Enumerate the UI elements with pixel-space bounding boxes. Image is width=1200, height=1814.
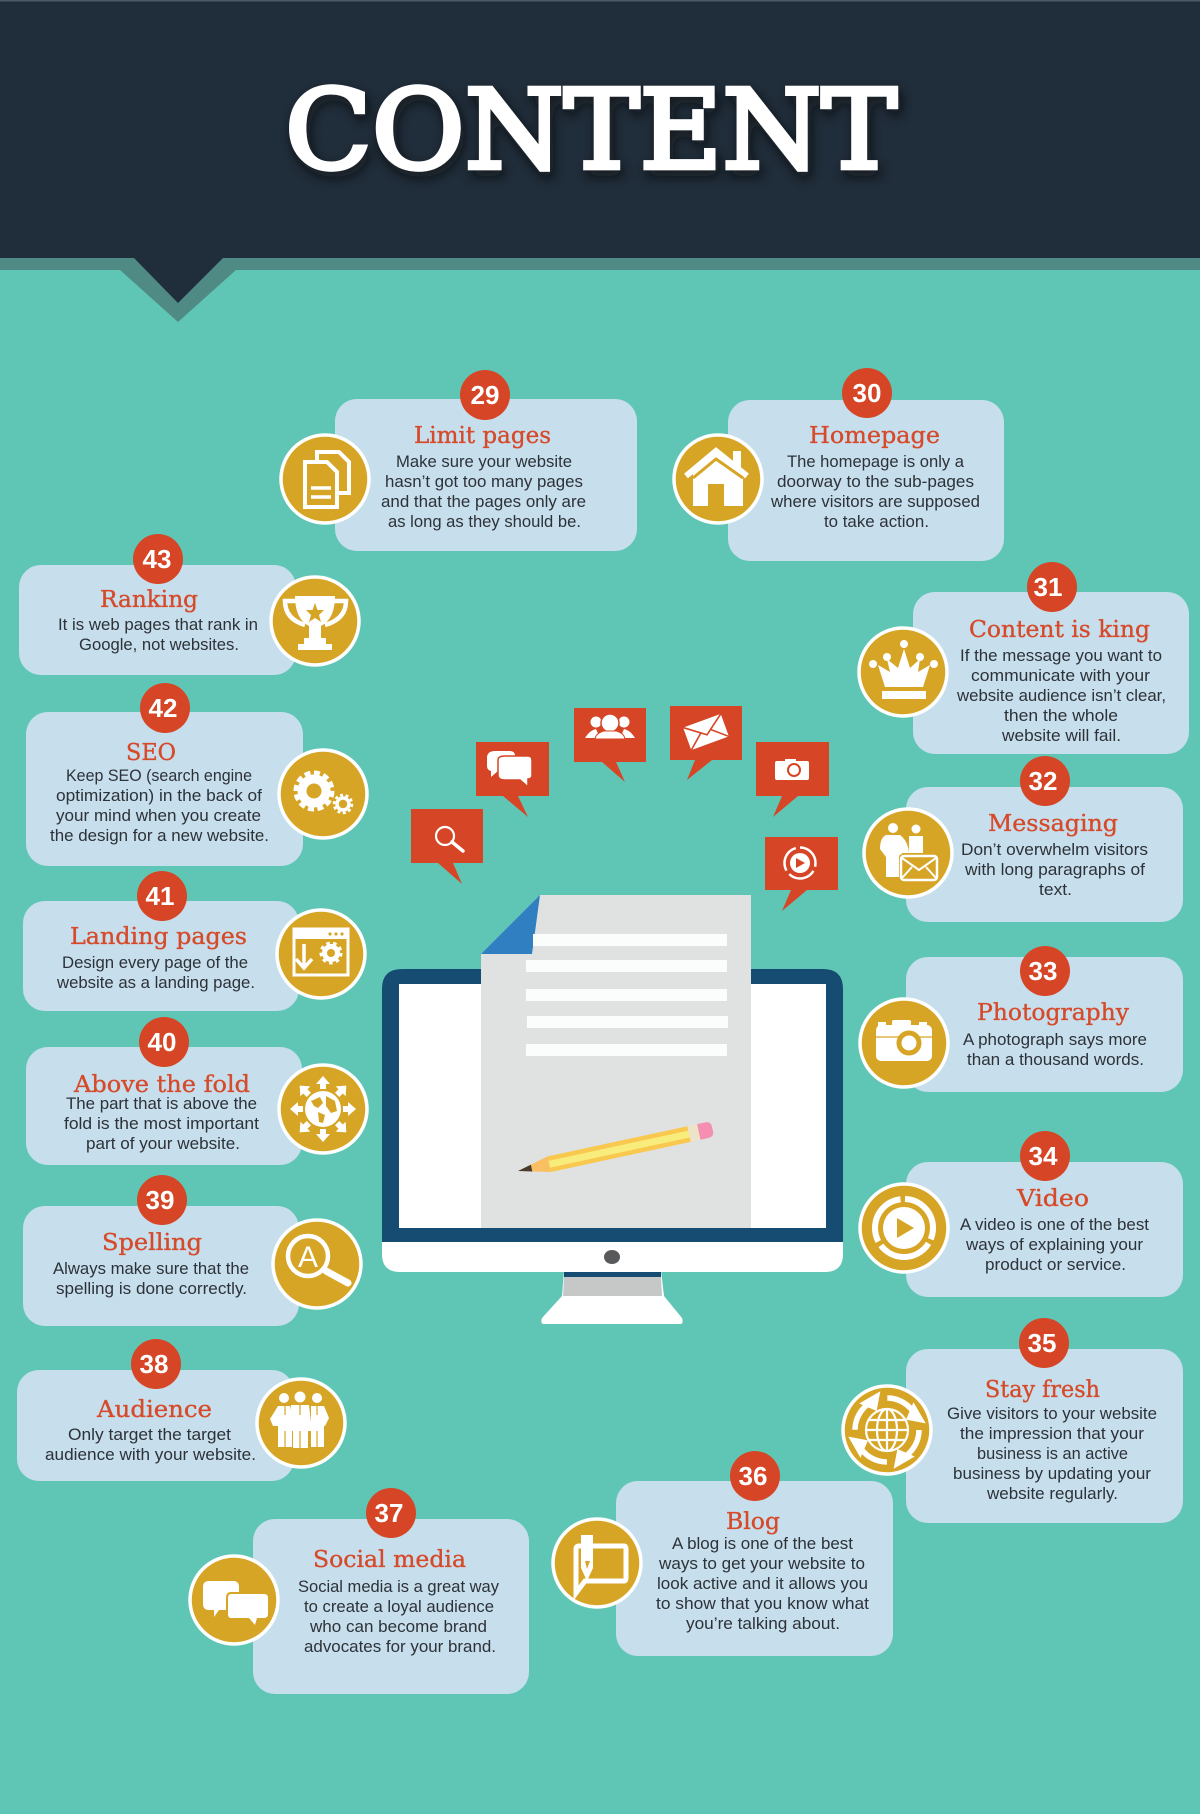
icon: messaging — [864, 809, 952, 897]
body text: you’re talking about. — [686, 1614, 840, 1633]
badge 33 — [1020, 946, 1070, 996]
icon: audience — [257, 1379, 345, 1467]
heading: Homepage — [809, 423, 940, 449]
badge 32: 32 — [1029, 766, 1057, 796]
heading: Spelling — [102, 1230, 202, 1256]
body text: Make sure your website — [396, 452, 572, 471]
body text — [298, 1577, 499, 1656]
title: CONTENT — [285, 66, 897, 194]
badge 31: 31 — [1034, 572, 1062, 602]
heading: Limit pages — [414, 423, 551, 449]
body text: Don’t overwhelm visitors — [961, 840, 1148, 859]
document page — [481, 895, 751, 1228]
badge 43: 43 — [143, 544, 171, 574]
panel: 37 social media — [190, 1488, 529, 1694]
badge 39 — [137, 1175, 187, 1225]
bubble: people — [574, 708, 646, 782]
monitor illustration — [382, 895, 843, 1324]
panel: 36 blog — [553, 1451, 893, 1656]
badge 35 — [1019, 1318, 1069, 1368]
body text: and that the pages only are — [381, 492, 586, 511]
body text — [64, 1094, 259, 1153]
panel: 42 seo — [26, 683, 367, 866]
body text: then the whole — [1004, 706, 1118, 725]
body text: website audience isn’t clear, — [956, 686, 1166, 705]
body text — [56, 953, 255, 992]
monitor stand — [541, 1270, 683, 1324]
body text: business by updating your — [953, 1464, 1151, 1483]
icon: house — [674, 435, 762, 523]
body text: look active and it allows you — [657, 1574, 868, 1593]
badge 36: 36 — [739, 1461, 767, 1491]
badge 29: 29 — [471, 380, 499, 410]
body text: ways to get your website to — [658, 1554, 865, 1573]
body text: A photograph says more — [963, 1030, 1147, 1049]
badge 38: 38 — [140, 1349, 168, 1379]
badge 42 — [140, 683, 190, 733]
body text — [963, 1030, 1147, 1069]
badge 40 — [139, 1017, 189, 1067]
bubble: search — [411, 809, 483, 884]
panel: 43 ranking — [19, 534, 359, 675]
badge 38 — [131, 1339, 181, 1389]
icon: gears — [279, 750, 367, 838]
badge 33: 33 — [1029, 956, 1057, 986]
body text — [770, 452, 980, 531]
body text: part of your website. — [86, 1134, 240, 1153]
body text: Design every page of the — [62, 953, 248, 972]
body text: business is an active — [977, 1444, 1128, 1463]
badge 41 — [137, 871, 187, 921]
body text: as long as they should be. — [388, 512, 581, 531]
bubble: camera — [756, 742, 829, 817]
panel: 40 above the fold — [26, 1017, 367, 1165]
heading: Ranking — [100, 587, 198, 613]
panel: 38 audience — [17, 1339, 345, 1481]
icon: blog — [553, 1519, 641, 1607]
bubble: chat — [476, 742, 549, 817]
heading: Landing pages — [70, 924, 247, 950]
heading: Blog — [726, 1509, 780, 1535]
body text: hasn’t got too many pages — [385, 472, 583, 491]
body text: Google, not websites. — [79, 635, 239, 654]
panel: 31 content is king — [859, 562, 1189, 754]
body text: spelling is done correctly. — [56, 1279, 247, 1298]
icon: crown — [859, 628, 947, 716]
body text: to create a loyal audience — [304, 1597, 494, 1616]
badge 31 — [1027, 562, 1077, 612]
body text: doorway to the sub-pages — [777, 472, 974, 491]
panel: 32 messaging — [864, 756, 1183, 922]
body text: audience with your website. — [45, 1445, 256, 1464]
badge 36 — [730, 1451, 780, 1501]
body text: product or service. — [985, 1255, 1126, 1274]
panel: 33 photography — [860, 946, 1183, 1092]
pencil — [516, 1121, 714, 1179]
heading: Photography — [977, 1000, 1129, 1026]
body text — [50, 766, 269, 845]
icon: documents — [281, 435, 369, 523]
icon: globe arrows — [279, 1065, 367, 1153]
body text: The part that is above the — [66, 1094, 257, 1113]
panel: 29 limit pages — [281, 370, 637, 551]
body text — [45, 1425, 256, 1464]
heading: Above the fold — [73, 1072, 250, 1098]
icon: globe with arrows — [843, 1386, 931, 1474]
icon: camera — [860, 999, 948, 1087]
body text: website regularly. — [986, 1484, 1118, 1503]
body text: website as a landing page. — [56, 973, 255, 992]
heading: Audience — [96, 1397, 212, 1423]
body text: to show that you know what — [656, 1594, 869, 1613]
badge 40: 40 — [148, 1027, 176, 1057]
body text: who can become brand — [309, 1617, 487, 1636]
body text: Only target the target — [68, 1425, 231, 1444]
badge 43 — [133, 534, 183, 584]
body text: optimization) in the back of — [56, 786, 262, 805]
bubble: video — [765, 837, 838, 911]
badge 35: 35 — [1028, 1328, 1056, 1358]
body text: to take action. — [824, 512, 929, 531]
badge 30 — [842, 368, 892, 418]
body text: text. — [1039, 880, 1072, 899]
icon: video — [860, 1184, 948, 1272]
body text: A video is one of the best — [960, 1215, 1149, 1234]
panel: 34 video — [860, 1131, 1183, 1297]
body text: than a thousand words. — [967, 1050, 1144, 1069]
body text: advocates for your brand. — [304, 1637, 496, 1656]
body text — [960, 1215, 1149, 1274]
badge 32 — [1020, 756, 1070, 806]
panel: 30 homepage — [674, 368, 1004, 561]
body text — [656, 1534, 869, 1633]
body text: Give visitors to your website — [947, 1404, 1157, 1423]
body text: communicate with your — [971, 666, 1150, 685]
body text: the design for a new website. — [50, 826, 269, 845]
body text: with long paragraphs of — [964, 860, 1145, 879]
body text: A blog is one of the best — [672, 1534, 853, 1553]
body text: your mind when you create — [56, 806, 261, 825]
body text: Always make sure that the — [53, 1259, 249, 1278]
badge 29 — [460, 370, 510, 420]
panel: 35 stay fresh — [843, 1318, 1183, 1523]
body text: fold is the most important — [64, 1114, 259, 1133]
icon: chat bubbles — [190, 1556, 278, 1644]
body text: Keep SEO (search engine — [66, 766, 252, 785]
body text — [53, 1259, 249, 1298]
monitor body — [382, 969, 843, 1272]
heading: Stay fresh — [985, 1377, 1100, 1403]
heading: Social media — [313, 1547, 466, 1573]
body text: where visitors are supposed — [770, 492, 980, 511]
icon: magnifier: A — [298, 1241, 318, 1274]
badge 34 — [1020, 1131, 1070, 1181]
body text: Social media is a great way — [298, 1577, 499, 1596]
body text: ways of explaining your — [965, 1235, 1143, 1254]
heading: Messaging — [988, 811, 1118, 837]
panel: 41 landing pages — [23, 871, 365, 1011]
icon: magnifier — [273, 1220, 361, 1308]
badge 34: 34 — [1029, 1141, 1058, 1171]
heading: Content is king — [969, 617, 1150, 643]
heading: Video — [1016, 1186, 1089, 1212]
body text — [58, 615, 258, 654]
body text: It is web pages that rank in — [58, 615, 258, 634]
body text — [381, 452, 586, 531]
body text — [961, 840, 1148, 899]
body text — [956, 646, 1166, 745]
badge 30: 30 — [853, 378, 881, 408]
icon: trophy — [271, 577, 359, 665]
icon: landing page — [277, 910, 365, 998]
body text: the impression that your — [960, 1424, 1144, 1443]
body text: The homepage is only a — [787, 452, 965, 471]
badge 37 — [366, 1488, 416, 1538]
body text: website will fail. — [1001, 726, 1121, 745]
body text: If the message you want to — [960, 646, 1162, 665]
panel: 39 spelling — [23, 1175, 361, 1326]
badge 37: 37 — [375, 1498, 403, 1528]
body text — [947, 1404, 1157, 1503]
heading: SEO — [126, 740, 176, 766]
badge 39: 39 — [146, 1185, 174, 1215]
badge 41: 41 — [146, 881, 174, 911]
badge 42: 42 — [149, 693, 177, 723]
bubble: mail — [670, 706, 742, 780]
header banner — [0, 0, 1200, 322]
